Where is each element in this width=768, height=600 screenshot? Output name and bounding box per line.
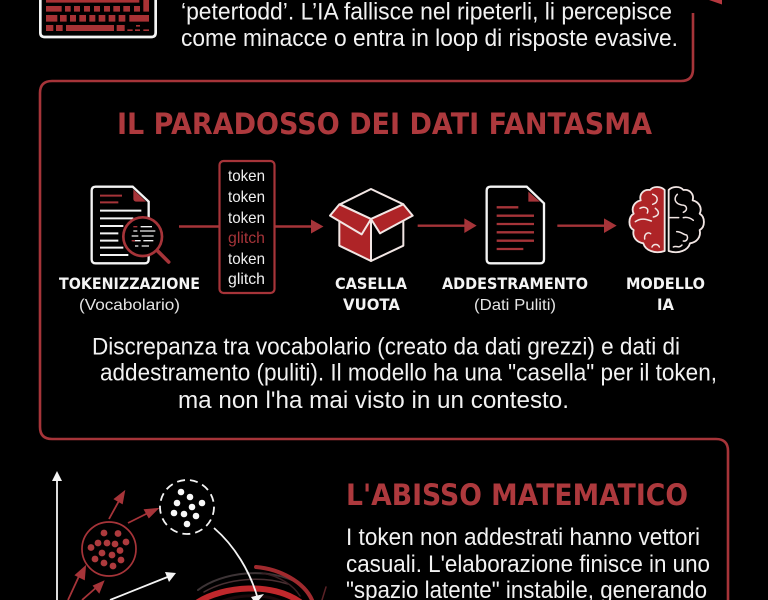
text block: discrepanza: Discrepanza tra vocabolario (creato da dati grezzi) e dati di: [92, 334, 680, 360]
arrow: box to addestramento: [418, 218, 477, 233]
heading: il paradosso dei dati fantasma: IL PARADOSSO DEI DATI FANTASMA: [117, 107, 653, 141]
label: modello ia: [626, 274, 705, 314]
icon: empty box: [330, 189, 413, 261]
arrow tip: top right: [709, 0, 722, 4]
text block: top panel description: [181, 0, 678, 52]
panel: token list: glitch: [228, 230, 265, 247]
arrow: token list to box: [274, 220, 324, 234]
arrow: tokenizzazione to token list: [179, 225, 219, 228]
text block: discrepanza: [92, 334, 717, 414]
chart axis: vertical arrow: [52, 471, 62, 600]
label: addestramento: [442, 274, 588, 314]
panel: token list: glitch: [228, 271, 265, 288]
text block: discrepanza: ma non l'ha mai visto in un contesto.: [178, 387, 569, 414]
label: tokenizzazione: TOKENIZZAZIONE: [59, 274, 200, 293]
text block: top panel description: come minacce o entra in loop di risposte evasive.: [181, 25, 678, 52]
icon: document with magnifier: [92, 187, 169, 263]
label: modello ia: IA: [657, 295, 675, 314]
arrow: curve into vortex: [214, 528, 264, 600]
label: casella vuota: CASELLA: [335, 274, 408, 293]
icon: vortex: [198, 567, 326, 600]
panel: token list: token: [228, 251, 265, 268]
label: addestramento: (Dati Puliti): [474, 297, 556, 314]
panel: token list: [220, 161, 274, 293]
text block: discrepanza: addestramento (puliti). Il modello ha una "casella" per il token,: [100, 360, 717, 386]
label: tokenizzazione: [59, 274, 200, 314]
icon: clean document: [487, 187, 544, 263]
text block: abisso description: casuali. L'elaborazione finisce in uno: [346, 551, 710, 578]
label: tokenizzazione: (Vocabolario): [79, 297, 180, 314]
cluster: white dashed tokens: [160, 480, 214, 534]
arrow: white vector: [110, 572, 176, 600]
label: casella vuota: [335, 274, 408, 314]
label: addestramento: ADDESTRAMENTO: [442, 274, 588, 293]
label: casella vuota: VUOTA: [343, 295, 401, 314]
arrow: addestramento to modello: [557, 218, 617, 233]
panel: token list: token: [228, 168, 265, 185]
label: modello ia: MODELLO: [626, 274, 705, 293]
cluster: red tokens: [82, 522, 136, 576]
heading: l'abisso matematico: L'ABISSO MATEMATICO: [346, 478, 688, 512]
arrows: red vectors: [68, 492, 157, 600]
text block: abisso description: I token non addestrati hanno vettori: [346, 524, 700, 551]
icon: keyboard: [40, 0, 156, 37]
panel: token list: token: [228, 189, 265, 206]
icon: brain: [629, 187, 704, 252]
text block: abisso description: [346, 524, 710, 600]
panel: token list: token: [228, 210, 265, 227]
